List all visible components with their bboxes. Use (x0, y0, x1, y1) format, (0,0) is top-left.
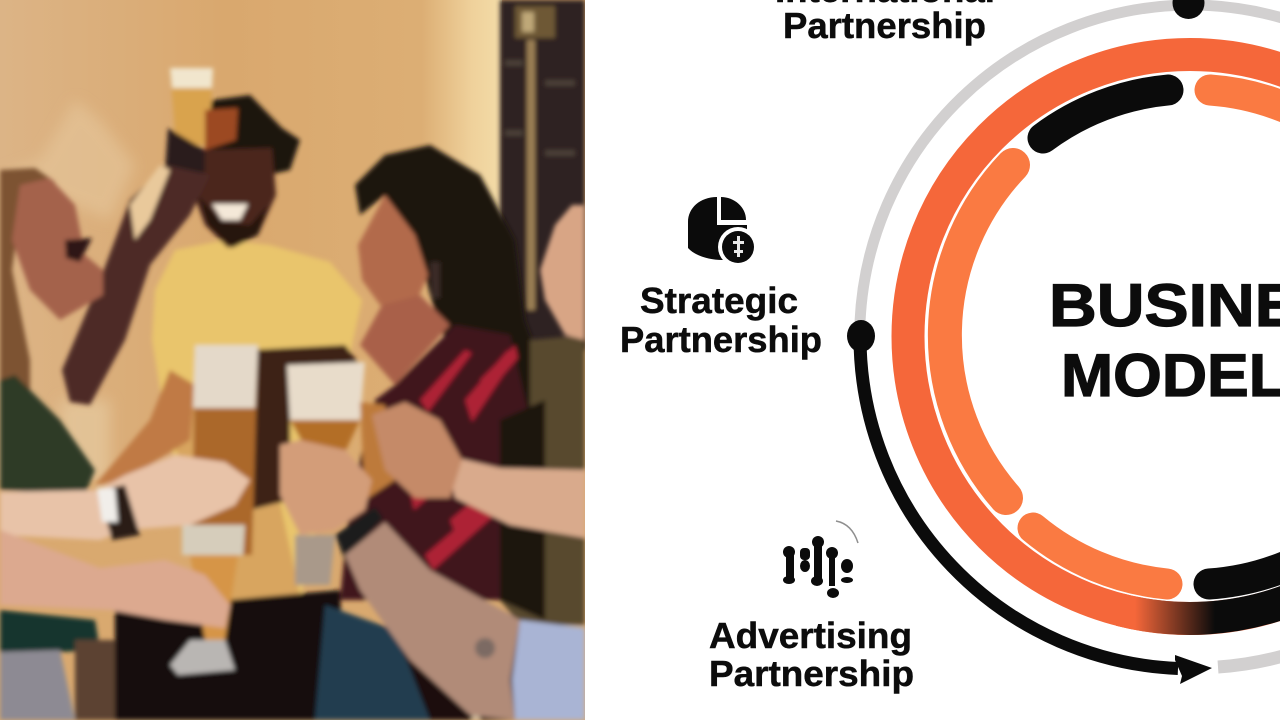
center title: MODEL (1061, 342, 1280, 409)
label: advertising partnership: Partnership (709, 653, 914, 694)
raised hand and dark arm (165, 128, 205, 180)
icon: pie chart with badge (688, 197, 758, 267)
dark hand behind glasses (250, 345, 360, 510)
white panel background (585, 0, 1280, 720)
woman centre: hair (355, 145, 550, 420)
inner orange segment top right (1210, 90, 1280, 114)
inner black segment bottom (1209, 560, 1280, 584)
outer grey ring arc (860, 5, 1280, 322)
woman left: striped shorts (0, 650, 75, 720)
tattooed forearm (345, 522, 520, 720)
right beer mug (287, 362, 365, 420)
man: hat and head (205, 95, 300, 175)
dark brick column (500, 0, 585, 350)
dark fade at ring bottom (1120, 600, 1280, 618)
light blue cuff (512, 620, 585, 720)
left tall beer glass (191, 374, 260, 557)
label: advertising partnership (709, 615, 914, 694)
man right: dark torso (500, 335, 585, 625)
lower left arm (0, 530, 230, 628)
chart: circular business model rings (860, 5, 1280, 668)
man: dark trousers (115, 590, 345, 720)
inner orange segment left (945, 165, 1013, 498)
woman left: green shirt (0, 375, 95, 495)
icon: advertising bars (783, 521, 858, 598)
main orange ring (908, 54, 1280, 618)
hand behind left beer (95, 370, 195, 485)
raised beer glass (170, 89, 216, 150)
man right: head (540, 205, 585, 340)
label: strategic partnership: Partnership (620, 319, 822, 360)
lower dark clothing behind arms (400, 629, 520, 720)
label: strategic partnership (620, 280, 822, 360)
man: yellow t-shirt (152, 240, 362, 600)
woman left: face (12, 178, 103, 320)
arrow head (1175, 655, 1212, 684)
woman centre: jeans (315, 605, 430, 720)
label: advertising partnership: Advertising (709, 615, 912, 656)
woman centre: face and chest (358, 195, 428, 305)
wall background (0, 0, 502, 480)
right arm (445, 455, 585, 538)
inner orange segment bottom (1033, 528, 1167, 584)
label: strategic partnership: Strategic (640, 280, 798, 321)
outer grey ring continuation (1218, 654, 1280, 667)
hand holding mug (280, 440, 372, 535)
panel: photo of friends toasting with beer (0, 0, 585, 720)
inner black segment top (1043, 90, 1168, 138)
center title (1049, 272, 1280, 409)
node: top (1172, 0, 1204, 19)
wristband (335, 507, 383, 560)
left arm with watch (0, 455, 250, 540)
woman centre: red patterned top (340, 325, 530, 600)
woman left: hair (0, 168, 55, 395)
node: left (847, 320, 875, 352)
label: international partnership: Partnership (783, 5, 986, 46)
outer black arrow arc (860, 336, 1178, 668)
